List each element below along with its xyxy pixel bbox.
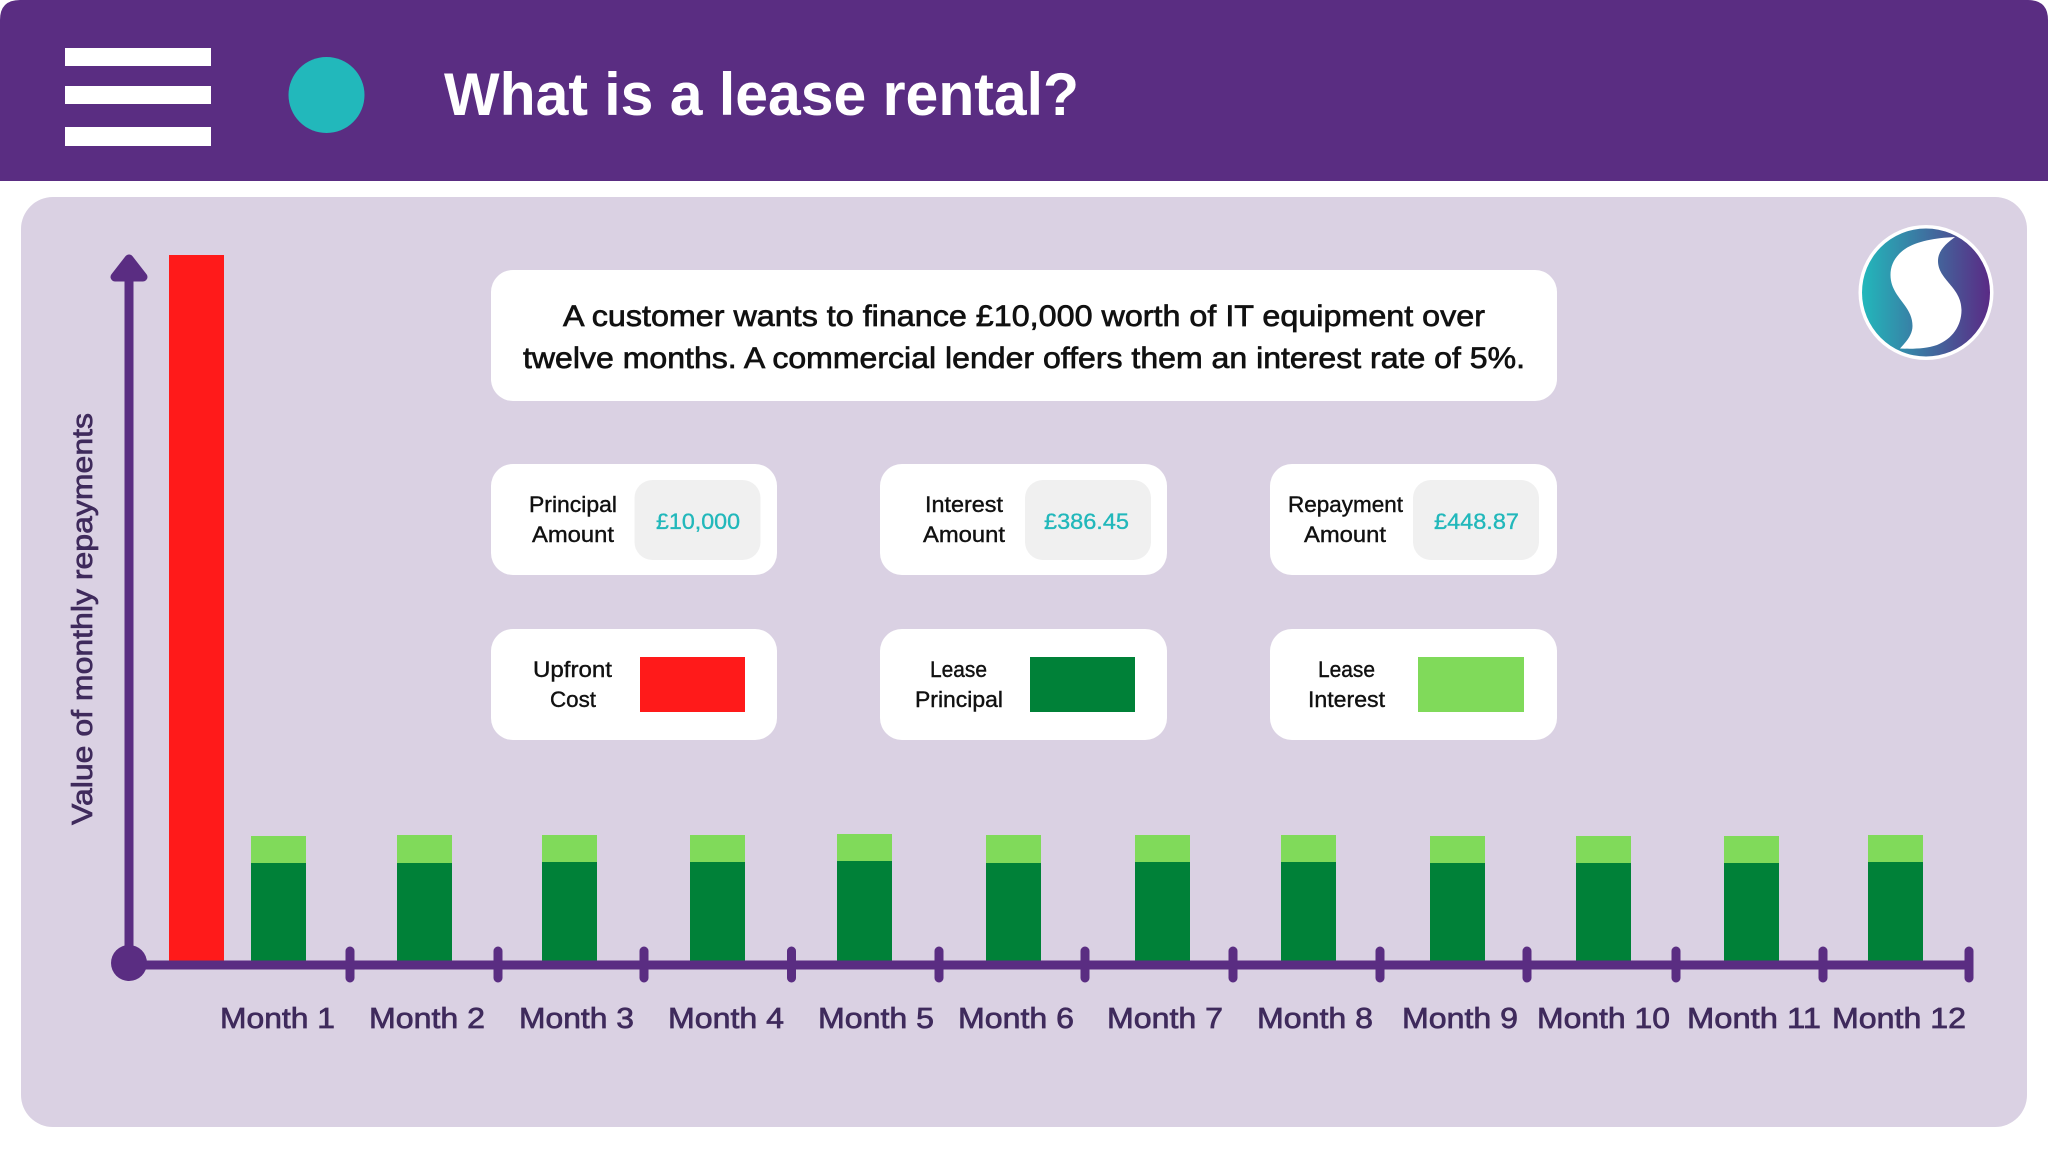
callout: scenario xyxy=(491,270,1557,401)
month 9 bar xyxy=(1430,836,1485,962)
y axis arrow xyxy=(115,259,143,965)
bar chart xyxy=(169,255,1923,962)
month 7 bar xyxy=(1135,835,1190,962)
card: principal amount xyxy=(491,464,777,575)
main panel xyxy=(21,197,2027,1127)
card: repayment amount xyxy=(1270,464,1557,575)
y axis label: Value of monthly repayments xyxy=(67,413,99,825)
month 5 bar xyxy=(837,834,892,962)
legend: lease interest xyxy=(1270,629,1557,740)
legend: upfront cost: Upfront xyxy=(533,657,612,682)
card: repayment amount: Amount xyxy=(1304,522,1386,547)
month 3 bar xyxy=(542,835,597,962)
legend: upfront cost xyxy=(491,629,777,740)
legend: lease interest: Interest xyxy=(1308,687,1385,712)
card: repayment amount: £448.87 xyxy=(1434,509,1519,534)
month 10 bar xyxy=(1576,836,1631,962)
upfront cost bar xyxy=(169,255,224,961)
month labels: Month 8 xyxy=(1257,1003,1373,1035)
month 8 bar xyxy=(1281,835,1336,962)
month labels: Month 10 xyxy=(1537,1003,1670,1035)
card: principal amount: £10,000 xyxy=(656,509,740,534)
callout: scenario: twelve months. A commercial lender offers them an interest rate of 5%. xyxy=(523,342,1525,375)
card: interest amount: £386.45 xyxy=(1044,509,1129,534)
month labels: Month 2 xyxy=(369,1003,485,1035)
month 11 bar xyxy=(1724,836,1779,962)
legend: lease principal: Principal xyxy=(915,687,1003,712)
month labels: Month 9 xyxy=(1402,1003,1518,1035)
legend: lease principal: Lease xyxy=(930,657,987,682)
month 1 bar xyxy=(251,836,306,962)
month 6 bar xyxy=(986,835,1041,962)
month 2 bar xyxy=(397,835,452,962)
month labels: Month 1 xyxy=(220,1003,335,1035)
icon: teal circle xyxy=(288,57,364,133)
legend: lease interest: Lease xyxy=(1318,657,1375,682)
tick marks xyxy=(350,951,1969,978)
month labels: Month 11 xyxy=(1687,1003,1821,1035)
axes xyxy=(111,259,1969,981)
callout: scenario: A customer wants to finance £10,000 worth of IT equipment over xyxy=(563,300,1485,333)
header bar xyxy=(0,0,2048,181)
card: interest amount xyxy=(880,464,1167,575)
month 4 bar xyxy=(690,835,745,962)
card: principal amount: Principal xyxy=(529,492,617,517)
month labels: Month 6 xyxy=(958,1003,1074,1035)
month labels: Month 4 xyxy=(668,1003,784,1035)
month labels: Month 7 xyxy=(1107,1003,1223,1035)
legend: lease principal xyxy=(880,629,1167,740)
logo xyxy=(1858,225,1994,360)
title: What is a lease rental? xyxy=(444,61,1079,128)
month labels: Month 12 xyxy=(1832,1003,1966,1035)
month labels: Month 5 xyxy=(818,1003,934,1035)
x axis xyxy=(129,960,1969,970)
legend: upfront cost: Cost xyxy=(550,687,596,712)
month labels xyxy=(220,1003,1966,1035)
month labels: Month 3 xyxy=(519,1003,634,1035)
card: interest amount: Amount xyxy=(923,522,1005,547)
card: principal amount: Amount xyxy=(532,522,614,547)
card: interest amount: Interest xyxy=(925,492,1003,517)
card: repayment amount: Repayment xyxy=(1288,492,1403,517)
icon: menu bars xyxy=(65,48,211,146)
month 12 bar xyxy=(1868,835,1923,962)
